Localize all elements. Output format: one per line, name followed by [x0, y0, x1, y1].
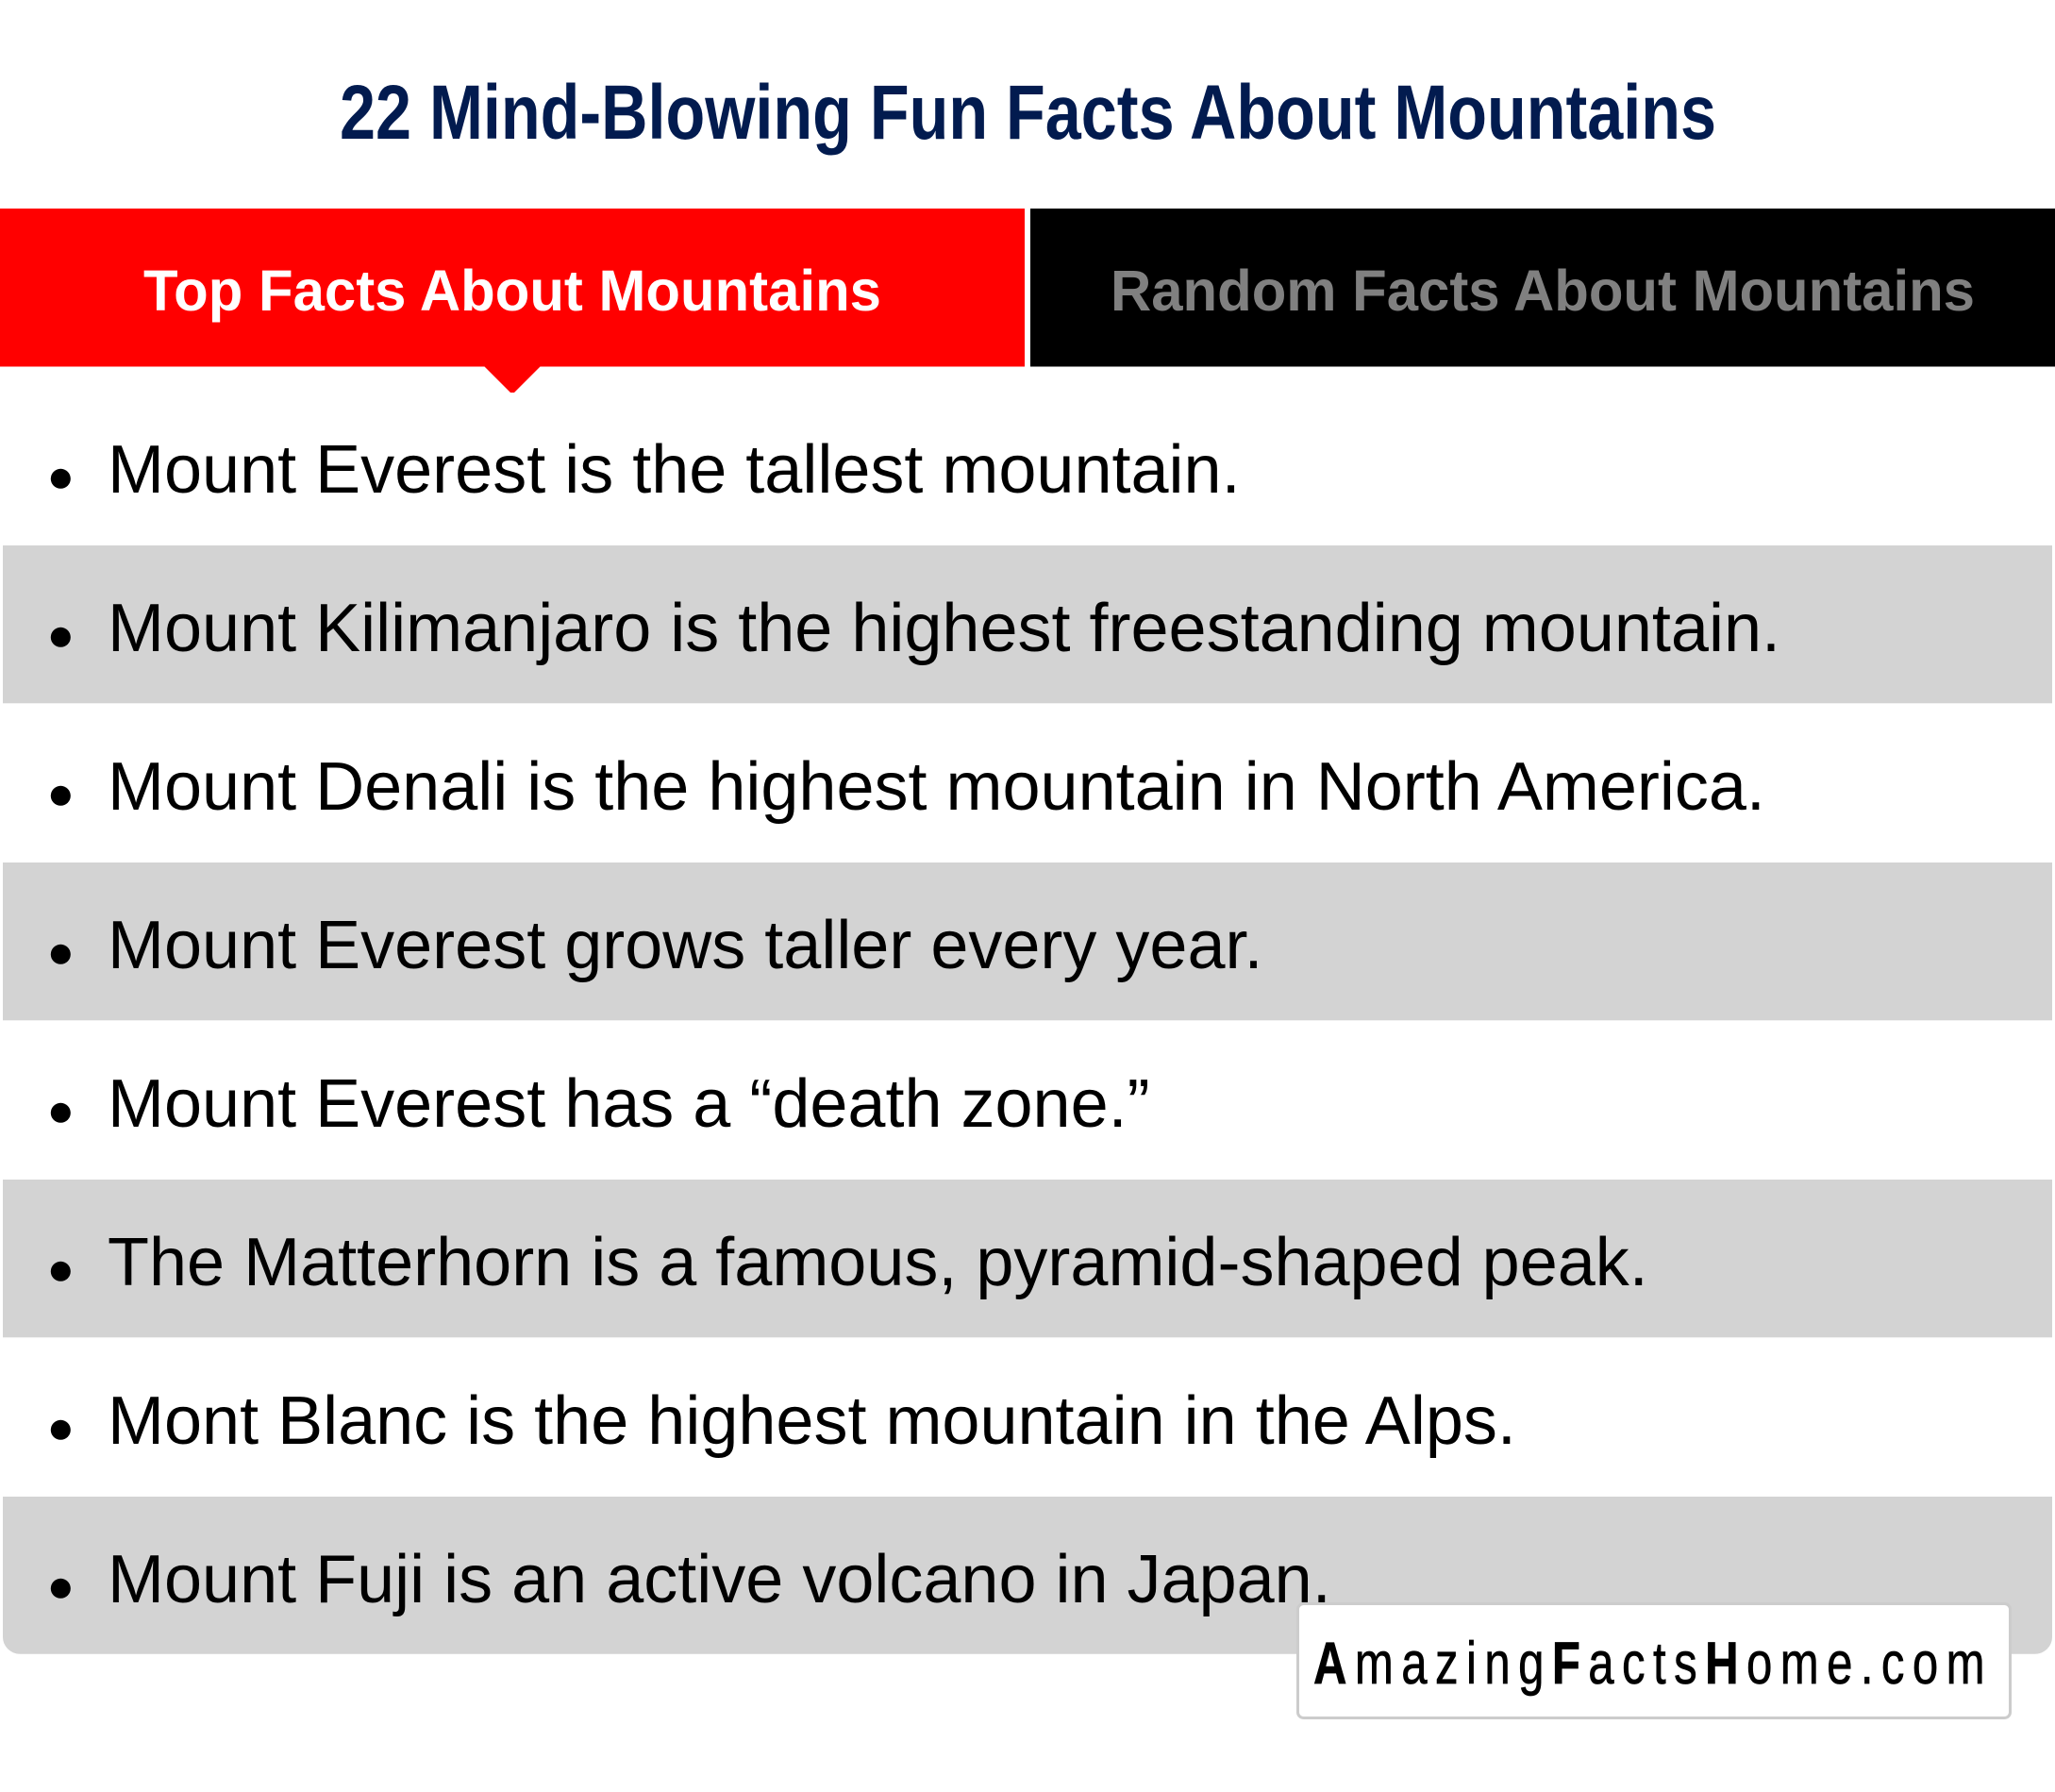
fact row 7: Mont Blanc is the highest mountain in the Alps. — [108, 1383, 1516, 1459]
fact row 2: Mount Kilimanjaro is the highest freestanding mountain. — [108, 591, 1780, 666]
fact row 8 — [3, 1497, 2052, 1654]
fact row 4: Mount Everest grows taller every year. — [108, 908, 1262, 983]
title: 22 Mind-Blowing Fun Facts About Mountains — [340, 70, 1716, 156]
fact list — [3, 432, 2052, 1654]
fact row 1: Mount Everest is the tallest mountain. — [108, 432, 1241, 508]
fact row 8: Mount Fuji is an active volcano in Japan. — [108, 1542, 1331, 1617]
tab: random facts (inactive) — [1030, 209, 2055, 366]
watermark: AmazingFactsHome.com — [1313, 1630, 1993, 1696]
fact row 5: Mount Everest has a “death zone.” — [108, 1066, 1150, 1142]
tab: top facts (active) — [0, 209, 1025, 393]
tab: random facts (inactive): Random Facts About Mountains — [1111, 259, 1975, 323]
tab: top facts (active): Top Facts About Mountains — [143, 259, 881, 323]
fact row 2 — [3, 545, 2052, 703]
fact row 6: The Matterhorn is a famous, pyramid-shaped peak. — [108, 1225, 1648, 1300]
watermark — [1298, 1604, 2010, 1717]
fact row 3: Mount Denali is the highest mountain in North America. — [108, 749, 1765, 825]
fact row 4 — [3, 863, 2052, 1020]
fact row 6 — [3, 1180, 2052, 1337]
